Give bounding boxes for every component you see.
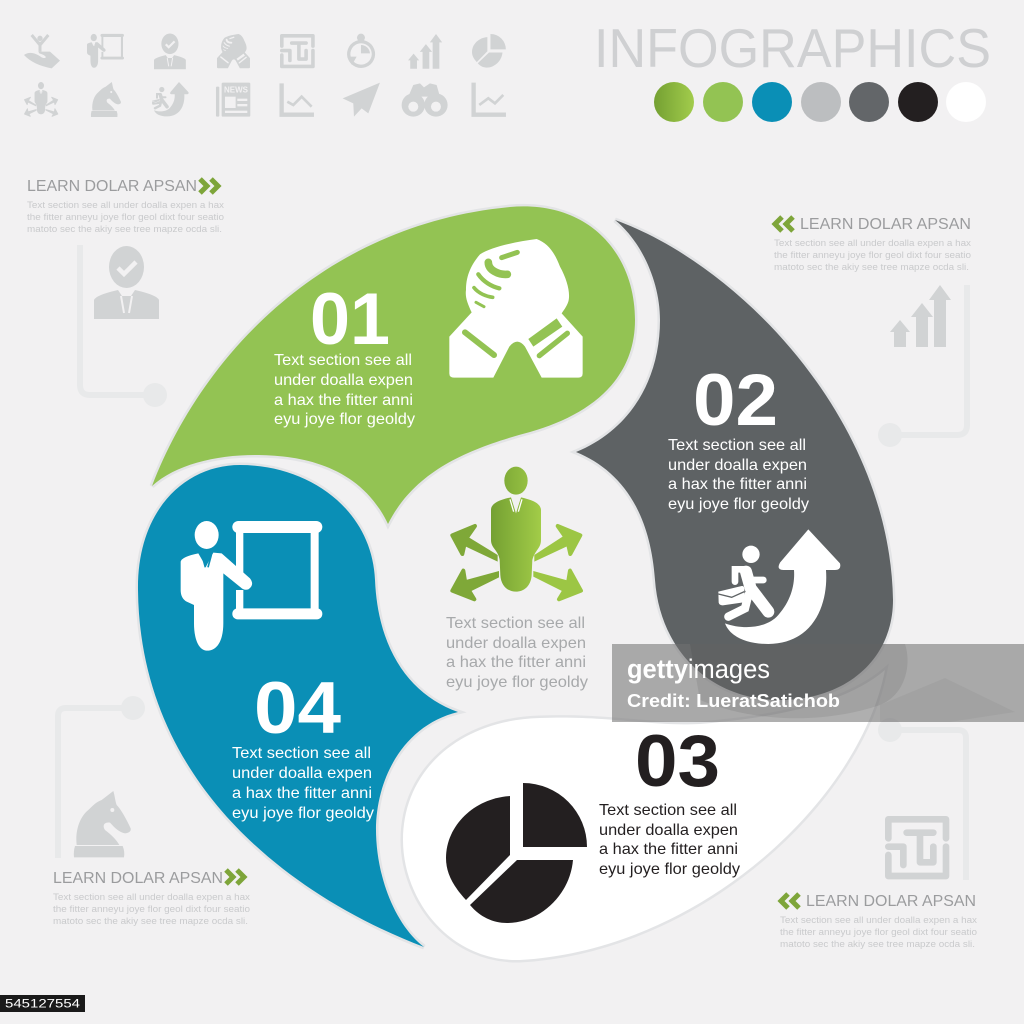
text block 01: eyu joye flor geoldy	[274, 411, 415, 428]
image id tag	[0, 995, 85, 1012]
callout: top left: Text section see all under doalla expen a hax	[27, 200, 225, 210]
connector: bottom left	[58, 696, 145, 858]
icon: presenter	[181, 521, 322, 651]
center text block: eyu joye flor geoldy	[446, 674, 588, 691]
icon: growth bars large	[890, 285, 951, 347]
panel: 03 white petal	[403, 670, 885, 960]
panel: 04 blue petal	[138, 465, 458, 947]
icon: hand holding person	[24, 35, 60, 68]
image id tag: 545127554	[5, 998, 81, 1010]
connector: top right	[878, 285, 967, 447]
icon: person check small	[154, 34, 186, 69]
text block 03: under doalla expen	[599, 822, 738, 839]
callout: top left: LEARN DOLAR APSAN	[27, 178, 197, 195]
callout: bottom left: Text section see all under doalla expen a hax	[53, 892, 251, 902]
icon: pie chart	[446, 783, 587, 923]
text block 02	[668, 437, 809, 513]
callout: top right: matoto sec the akiy see tree mapze ocda sli.	[774, 262, 969, 272]
connector: bottom right	[878, 718, 966, 880]
text block 02: Text section see all	[668, 437, 806, 454]
callout: bottom left: the fitter anneyu joye flor geol dixt four seatio	[53, 904, 250, 914]
icon: knight large	[74, 791, 131, 857]
callout: bottom left: LEARN DOLAR APSAN	[53, 870, 223, 887]
number 03: 03	[635, 721, 720, 802]
text block 01: Text section see all	[274, 352, 412, 369]
callout: top left	[27, 178, 225, 234]
center icon: person with arrows	[452, 467, 581, 599]
icon: newspaper: NEWS	[224, 85, 248, 95]
callout: bottom left	[53, 870, 251, 926]
callout: bottom left: matoto sec the akiy see tree mapze ocda sli.	[53, 916, 248, 926]
center text block	[446, 615, 588, 691]
callout: top right	[774, 216, 972, 272]
text block 04	[232, 745, 374, 822]
text block 02: eyu joye flor geoldy	[668, 496, 809, 513]
icon: binoculars	[402, 83, 448, 117]
icon: runner with arrow	[718, 529, 840, 644]
text block 04: Text section see all	[232, 745, 371, 762]
callout: bottom right: LEARN DOLAR APSAN	[806, 893, 976, 910]
callout: top right: LEARN DOLAR APSAN	[800, 216, 971, 233]
text block 02: a hax the fitter anni	[668, 476, 807, 493]
icon: maze large	[888, 819, 946, 876]
watermark banner	[612, 644, 1024, 722]
icon: chart up	[474, 83, 506, 115]
icon: person arrows small	[25, 82, 58, 116]
callout: top left: the fitter anneyu joye flor geol dixt four seatio	[27, 212, 224, 222]
text block 01	[274, 352, 415, 428]
icon: presenter small	[87, 34, 124, 68]
center text block: Text section see all	[446, 615, 585, 632]
panel: 02 grey petal	[576, 220, 893, 700]
icon: chart down	[282, 83, 314, 115]
callout: bottom right: matoto sec the akiy see tree mapze ocda sli.	[780, 939, 975, 949]
text block 04: a hax the fitter anni	[232, 785, 372, 802]
icon: paper plane	[343, 83, 380, 117]
icon: newspaper	[216, 83, 250, 117]
icon: person check large	[94, 246, 159, 319]
text block 04: under doalla expen	[232, 765, 372, 782]
callout: top right: the fitter anneyu joye flor geol dixt four seatio	[774, 250, 971, 260]
center text block: under doalla expen	[446, 635, 586, 652]
number 01: 01	[310, 279, 390, 360]
icon: clasped hands	[449, 239, 583, 378]
watermark logo: gettyimages	[627, 654, 770, 684]
callout: bottom right	[780, 893, 978, 949]
number 04: 04	[254, 668, 341, 749]
callout: top right: Text section see all under doalla expen a hax	[774, 238, 972, 248]
text block 03: eyu joye flor geoldy	[599, 861, 740, 878]
icon: maze small	[282, 36, 313, 66]
center text block: a hax the fitter anni	[446, 654, 586, 671]
text block 01: a hax the fitter anni	[274, 392, 413, 409]
text block 03	[599, 802, 740, 878]
text block 04: eyu joye flor geoldy	[232, 805, 374, 822]
watermark credit: Credit: LueratSatichob	[627, 691, 840, 711]
icon: stopwatch	[347, 34, 373, 66]
callout: top left: matoto sec the akiy see tree mapze ocda sli.	[27, 224, 222, 234]
icon: growth bars small	[408, 34, 442, 69]
panel: 01 green petal	[152, 206, 635, 524]
text block 02: under doalla expen	[668, 457, 807, 474]
icon: run arrow small	[152, 82, 189, 116]
colour swatches	[654, 82, 986, 122]
connector: top left	[80, 245, 167, 407]
icon strip	[24, 34, 506, 117]
icon: pie small	[472, 34, 506, 68]
icon: handshake small	[217, 34, 250, 68]
callout: bottom right: the fitter anneyu joye flor geol dixt four seatio	[780, 927, 977, 937]
text block 01: under doalla expen	[274, 372, 413, 389]
icon: knight small	[91, 82, 121, 117]
title: INFOGRAPHICS	[594, 17, 991, 79]
number 02: 02	[693, 360, 778, 441]
text block 03: a hax the fitter anni	[599, 841, 738, 858]
text block 03: Text section see all	[599, 802, 737, 819]
callout: bottom right: Text section see all under doalla expen a hax	[780, 915, 978, 925]
